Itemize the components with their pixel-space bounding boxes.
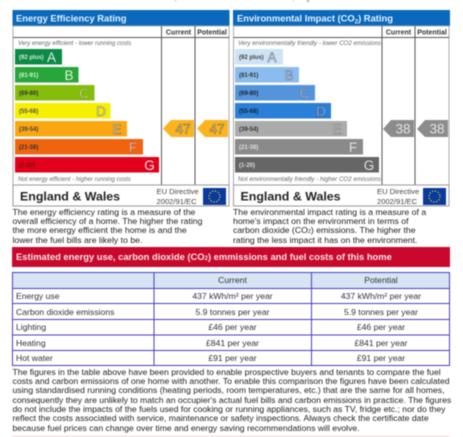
region footer: England & Wales (20, 190, 120, 204)
row label: energy use: Energy use (16, 291, 59, 301)
arrow: current rating 47 (163, 120, 194, 137)
band B: (81-91) (19, 73, 38, 79)
arrow: potential rating 47: 47 (209, 122, 225, 136)
row value: carbon dioxide potential: 5.9 tonnes per year (344, 307, 418, 317)
band C: C (79, 86, 89, 101)
panel header: Environmental Impact (CO (237, 12, 355, 24)
arrow: current rating 38: 38 (395, 122, 411, 136)
band C: (69-80) (239, 91, 258, 97)
band E: E (332, 122, 342, 137)
text: table explanation: because fuel prices can change over time and energy saving recommendations will evolve. (12, 423, 360, 433)
text: energy efficiency explanation: overall efficiency of a home. The higher the rating (12, 216, 202, 226)
icon: EU flag (423, 188, 446, 205)
band B: B (64, 68, 74, 83)
band D: D (316, 104, 326, 119)
arrow: potential rating 47 (197, 120, 228, 137)
region footer: EU Directive (156, 187, 199, 196)
band A: (92 plus) (19, 55, 44, 61)
band E: (39-54) (239, 127, 258, 133)
text: energy efficiency explanation: the more energy efficient the home is and the (12, 225, 187, 235)
row label: lighting: Lighting (16, 322, 46, 332)
text: environmental impact explanation (232, 206, 427, 246)
panel header: Energy Efficiency Rating (16, 12, 127, 24)
text: table explanation: using standardised running conditions (heating periods, room temperatures, etc.) that are the same for all homes, (12, 385, 444, 395)
region footer: England & Wales (240, 190, 341, 204)
table: energy use and costs (11, 271, 451, 367)
band D (15, 103, 110, 119)
band G (15, 157, 159, 173)
band D (235, 103, 331, 119)
top scale caption: Very energy efficient - lower running costs (18, 40, 131, 47)
top scale caption: Very environmentally friendly - lower CO2 emissions (238, 40, 381, 47)
arrow: potential rating 38: 38 (429, 122, 445, 136)
band A: (92 plus) (239, 55, 264, 61)
text: table explanation: consequently they are unlikely to match an occupier's actual fuel bills and carbon emissions in practice. The figures (12, 395, 451, 405)
band D: D (96, 104, 106, 119)
band A: A (267, 50, 277, 65)
text: table explanation: do not include the impacts of the fuels used for cooking or running appliances, such as TV, fridge etc.; nor do they (12, 404, 445, 414)
panel: energy efficiency rating (12, 9, 230, 208)
bottom scale caption: Not energy efficient - higher running costs (18, 176, 131, 183)
region footer (13, 185, 229, 206)
row value: hot water potential: £91 per year (357, 353, 405, 363)
band D: (55-68) (239, 109, 258, 115)
row label: heating: Heating (16, 338, 46, 348)
band F: (21-38) (239, 145, 258, 151)
chart frame (13, 26, 229, 185)
band G: (1-20) (239, 163, 255, 169)
text: energy efficiency explanation: lower the fuel bills are likely to be. (12, 235, 142, 245)
region footer: 2002/91/EC (377, 197, 418, 206)
panel header: 2 (355, 20, 359, 26)
region footer: EU Directive (377, 187, 419, 196)
text: table explanation: costs and carbon emissions of one home with another. To enable this comparison the figures have been calculated (12, 376, 450, 386)
band E: E (112, 122, 122, 137)
band D: (55-68) (19, 109, 38, 115)
row value: heating potential: £841 per year (354, 338, 408, 348)
chart frame (234, 26, 449, 185)
row value: energy use current: 437 kWh/m² per year (192, 291, 273, 301)
row value: lighting potential: £46 per year (357, 322, 405, 332)
row value: hot water current: £91 per year (208, 353, 257, 363)
band E (235, 121, 347, 137)
panel header (233, 10, 450, 26)
text: table explanation: The figures in the table above have been provided to enable prospective buyers and tenants to compare the fuel (12, 366, 441, 376)
table header: current: Current (218, 275, 247, 285)
band G: G (144, 158, 155, 173)
column headings: Potential (197, 30, 227, 36)
band C (15, 85, 94, 101)
text: environmental impact explanation: home's impact on the environment in terms of (233, 216, 408, 226)
band B (15, 67, 78, 83)
banner: estimated energy use heading (12, 247, 450, 267)
band B (235, 67, 299, 83)
band C: (69-80) (19, 91, 38, 97)
band E (15, 121, 127, 137)
band B: (81-91) (239, 73, 258, 79)
band F: F (129, 140, 137, 155)
band G (235, 157, 379, 173)
column headings (386, 30, 447, 36)
icon: EU flag (203, 188, 226, 205)
column headings: Potential (417, 30, 447, 36)
column headings (166, 30, 227, 36)
row value: heating current: £841 per year (206, 338, 259, 348)
column headings: Current (386, 30, 412, 36)
arrow: current rating 47: 47 (175, 122, 191, 136)
panel header (12, 10, 230, 26)
row value: carbon dioxide current: 5.9 tonnes per year (195, 307, 270, 317)
table header: potential: Potential (364, 275, 398, 285)
text: environmental impact explanation: rating the less impact it has on the environment. (233, 235, 417, 245)
band A: A (47, 50, 56, 65)
text: table explanation: reflect the costs associated with service, maintenance or safety inspections. Always check the certificate date (12, 413, 429, 423)
panel header: ) Rating (358, 12, 393, 24)
band F (15, 139, 143, 155)
text: environmental impact explanation: carbon dioxide (CO2) emissions. The higher the (233, 225, 416, 235)
text: energy efficiency explanation (12, 206, 203, 246)
text: table explanation (12, 366, 452, 434)
band C (235, 85, 315, 101)
band F: F (349, 140, 357, 155)
panel: environmental impact rating (232, 9, 451, 208)
banner: estimated energy use heading: Estimated energy use, carbon dioxide (CO2) emmissions and fuel costs of this home (16, 251, 392, 262)
band B: B (284, 68, 294, 83)
row value: lighting current: £46 per year (208, 322, 257, 332)
band E: (39-54) (19, 127, 38, 133)
band C: C (300, 86, 310, 101)
row value: energy use potential: 437 kWh/m² per year (341, 291, 421, 301)
band A (15, 49, 62, 65)
row label: hot water: Hot water (16, 353, 53, 363)
text: environmental impact explanation: The environmental impact rating is a measure of a (233, 206, 426, 216)
column headings: Current (166, 30, 192, 36)
band F: (21-38) (19, 145, 38, 151)
arrow: potential rating 38 (417, 120, 448, 137)
region footer: 2002/91/EC (156, 197, 197, 206)
row label: carbon dioxide emissions: Carbon dioxide emissions (16, 307, 114, 317)
band A (235, 49, 283, 65)
band F (235, 139, 363, 155)
arrow: current rating 38 (383, 120, 414, 137)
band G: (1-20) (19, 163, 35, 169)
region footer (234, 185, 449, 206)
text: energy efficiency explanation: The energy efficiency rating is a measure of the (12, 206, 195, 216)
bottom scale caption: Not environmentally friendly - higher CO2 emissions (238, 176, 381, 183)
band G: G (364, 158, 374, 173)
